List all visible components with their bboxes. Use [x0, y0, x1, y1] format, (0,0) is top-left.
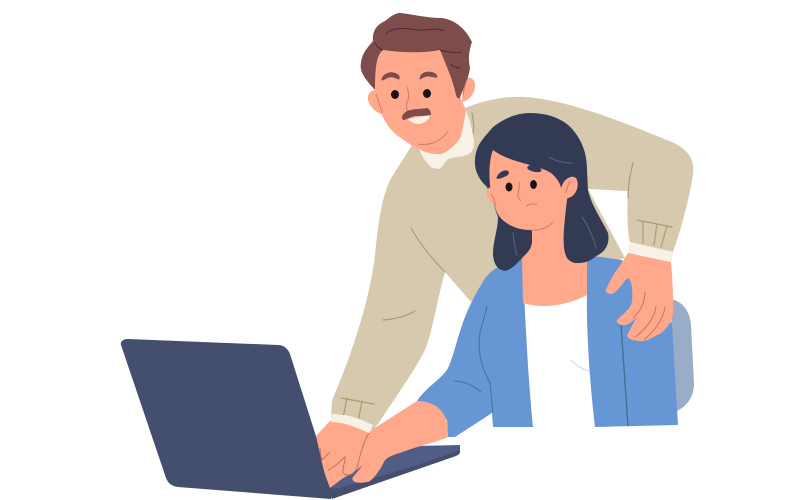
man: head [361, 13, 475, 169]
sleeve cuff: shoulder hand [628, 242, 673, 262]
finger lines [633, 292, 665, 340]
eyebrows [497, 165, 541, 178]
hair strands [375, 29, 461, 68]
nose, mouth and jaw lines [491, 181, 570, 230]
jacket: left side and sleeve [417, 255, 533, 437]
finger lines [320, 433, 369, 475]
hair strands [513, 157, 596, 255]
mouth [408, 115, 430, 124]
neck and face [374, 50, 466, 154]
eyebrows [382, 72, 437, 80]
ears [486, 177, 578, 207]
jacket lines [621, 325, 628, 426]
laptop [121, 339, 460, 499]
hair [361, 13, 472, 98]
sweater fold lines [341, 113, 672, 422]
eyes [506, 182, 512, 192]
moustache [402, 108, 431, 120]
white gap under arm [588, 189, 630, 258]
shirt collar [419, 110, 474, 169]
neck and chest [522, 200, 587, 306]
man: hand on shoulder [606, 253, 673, 341]
laptop front edge [330, 450, 460, 499]
laptop base [328, 445, 460, 498]
man: sweater body and arm [331, 97, 693, 430]
sleeve cuff: typing hand [331, 414, 373, 433]
right ear [462, 78, 475, 102]
jacket: right side [587, 255, 678, 427]
eyes [391, 90, 399, 99]
face [489, 150, 568, 230]
woman [417, 113, 678, 437]
nose and face lines [376, 80, 467, 144]
shirt fold [571, 360, 589, 371]
left ear [368, 90, 382, 114]
laptop screen back [121, 339, 333, 499]
hair [475, 113, 608, 271]
chair back [670, 299, 694, 411]
man and woman: hands on keyboard [316, 401, 448, 488]
